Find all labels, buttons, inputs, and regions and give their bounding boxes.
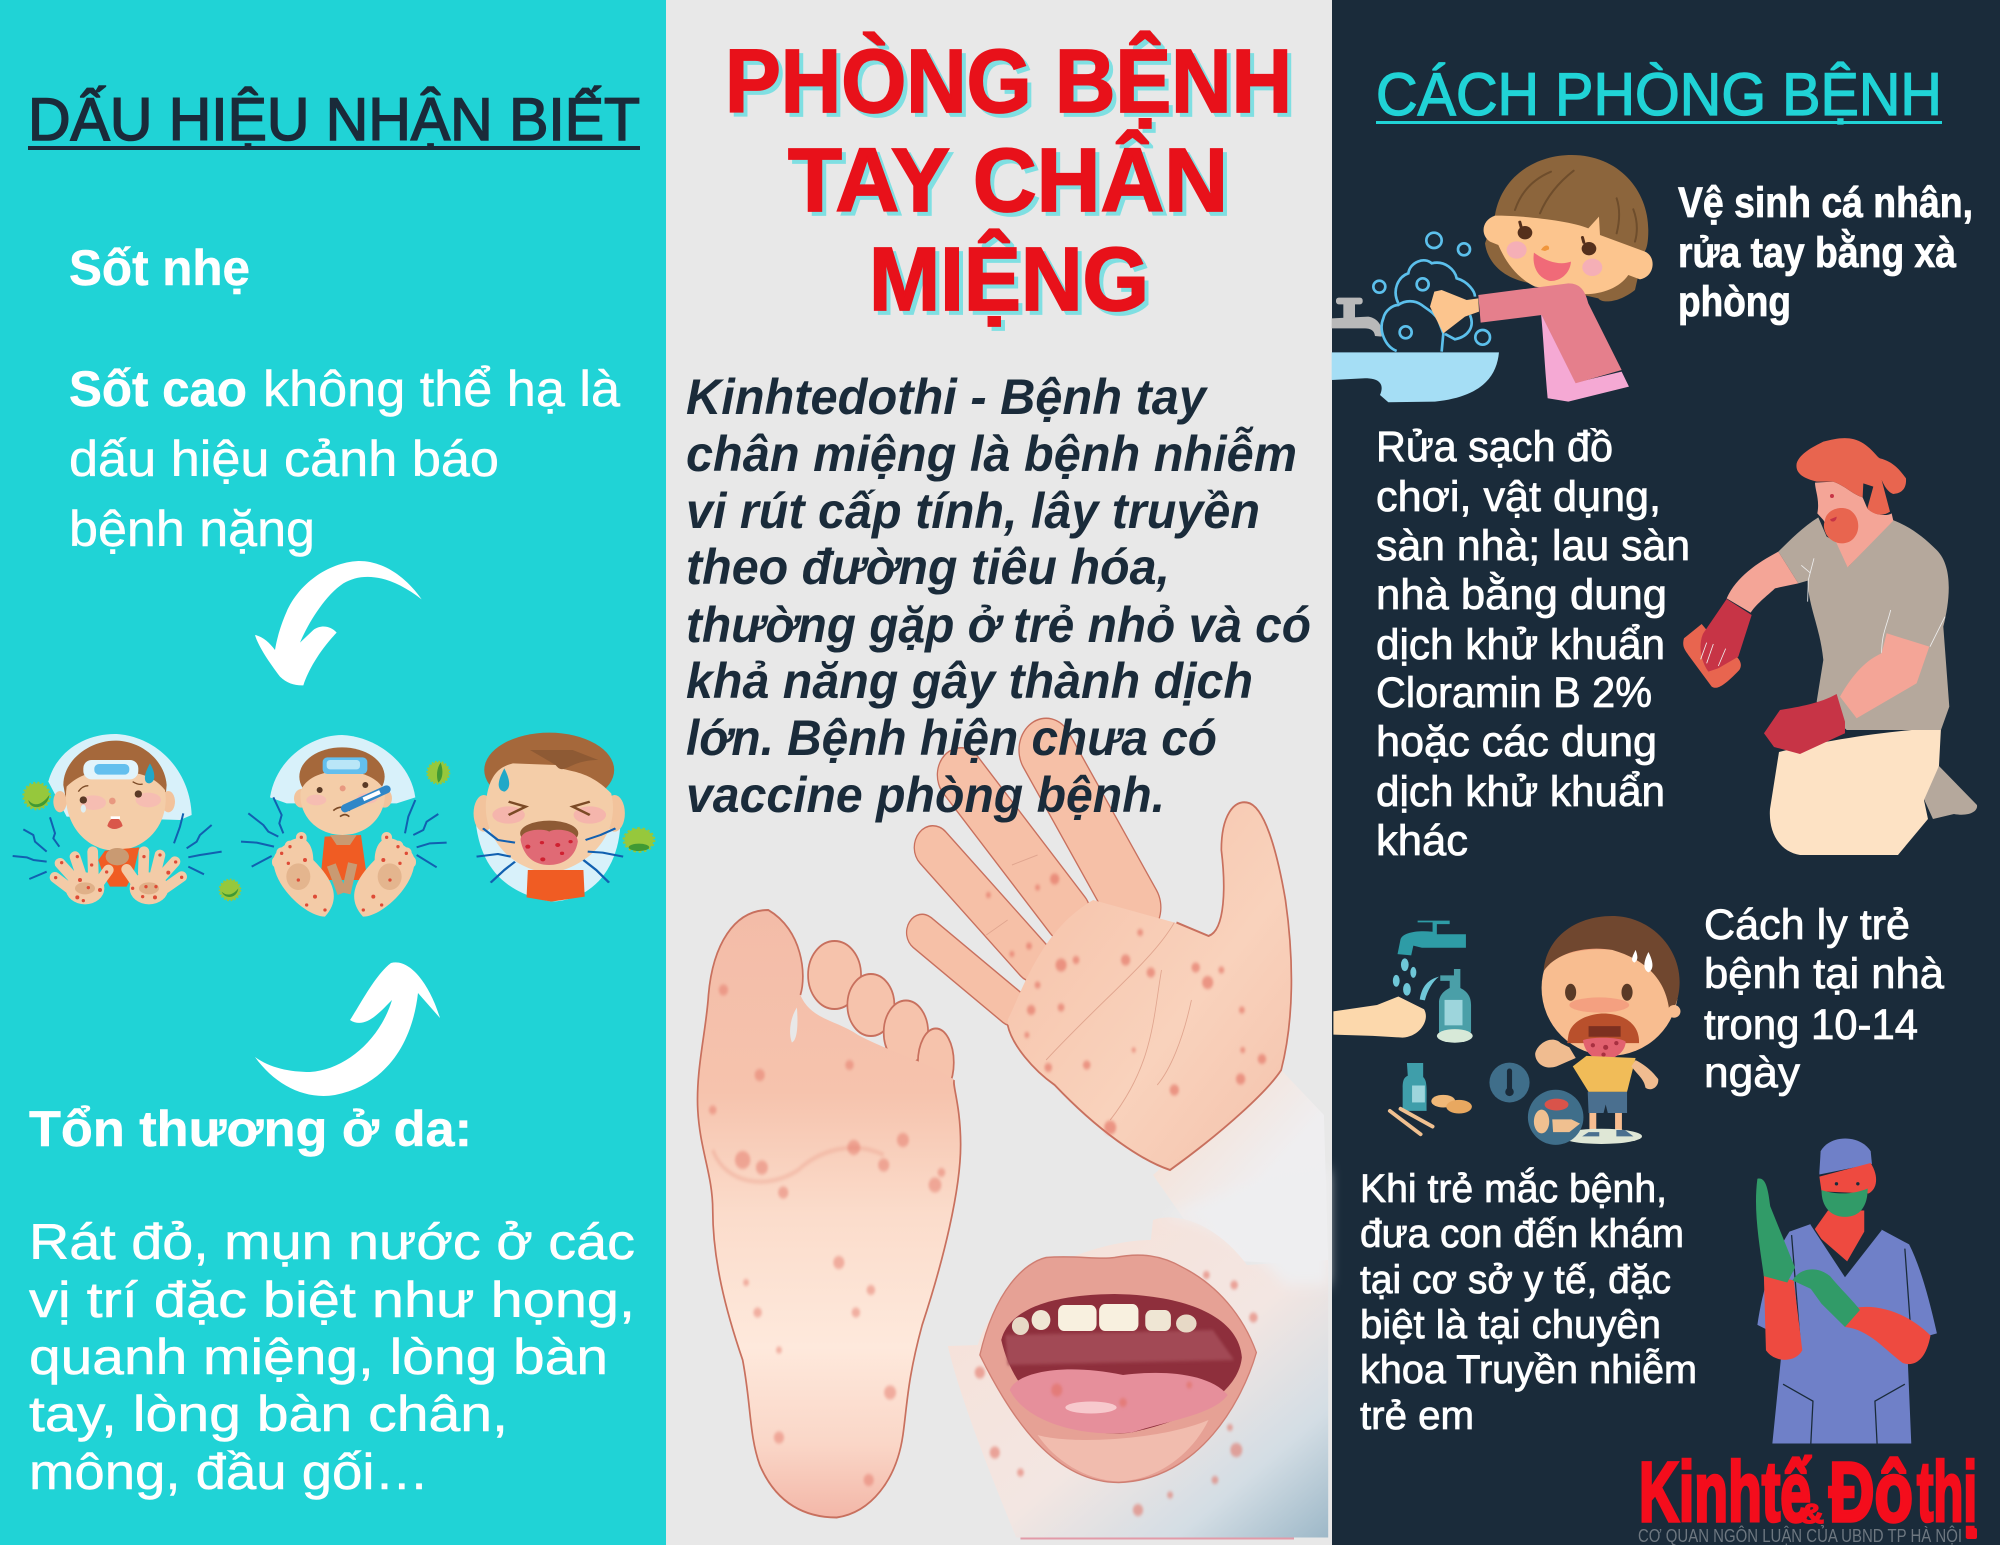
text: intro paragraph: thường gặp ở trẻ nhỏ và có [686,597,1311,653]
title [725,30,1292,330]
text: intro paragraph: lớn. Bệnh hiện chưa có [686,710,1217,766]
illustration: child with tongue [474,733,653,902]
text: see a doctor: tại cơ sở y tế, đặc [1360,1258,1671,1302]
arrow: up [255,962,440,1096]
text: high fever warning: Sốt cao [69,361,247,417]
logo: & [1800,1498,1824,1529]
illustrations: three sick children [13,733,653,917]
logo: Kinhtế [1639,1445,1811,1539]
text: cleaning: Rửa sạch đồ [1376,423,1613,471]
text: cleaning: chơi, vật dụng, [1376,473,1661,521]
text: mild fever: Sốt nhẹ [69,240,250,296]
title: MIỆNG [869,228,1149,330]
text: cleaning: khác [1376,817,1468,865]
text: high fever warning: bệnh nặng [69,501,315,557]
text: see a doctor: đưa con đến khám [1360,1212,1684,1256]
illustration: hand [922,750,1328,1265]
text: high fever warning: không thể hạ là [263,361,620,417]
text: isolate sick children: bệnh tại nhà [1704,950,1944,998]
text: isolate sick children: trong 10-14 [1704,1001,1918,1049]
text: cleaning: dịch khử khuẩn [1376,768,1665,816]
text: skin lesions description: Rát đỏ, mụn nước ở các [29,1214,635,1270]
text: intro paragraph: theo đường tiêu hóa, [686,539,1170,595]
title: TAY CHÂN [788,129,1228,231]
text: cleaning: hoặc các dung [1376,718,1657,766]
illustration: mouth [948,1170,1328,1538]
text: cleaning: Cloramin B 2% [1376,669,1652,717]
illustration: foot [698,910,961,1518]
text: see a doctor [1360,1166,1697,1438]
text: cleaning: dịch khử khuẩn [1376,621,1665,669]
text: intro paragraph [686,369,1311,823]
illustration: child with feet and thermometer [241,735,449,917]
text: skin lesions description: quanh miệng, lòng bàn [29,1329,608,1385]
text: personal hygiene: phòng [1678,278,1791,326]
heading: signs: DẤU HIỆU NHẬN BIẾT [28,86,640,153]
text: skin lesions description: tay, lòng bàn chân, [29,1386,508,1442]
illustration: child with hands [13,734,240,904]
text: intro paragraph: vi rút cấp tính, lây truyền [686,483,1260,539]
text: cleaning: nhà bằng dung [1376,571,1667,619]
illustration: doctor [1756,1138,1937,1444]
illustration: man cleaning floor [1683,438,1977,855]
panel: main background [666,0,1332,1545]
text: intro paragraph: Kinhtedothi - Bệnh tay [686,369,1208,425]
text: high fever warning: dấu hiệu cảnh báo [69,431,499,487]
text: see a doctor: trẻ em [1360,1394,1474,1438]
arrow: down [255,561,422,685]
illustration: sick boy [1489,916,1680,1145]
text: isolate sick children [1704,901,1944,1097]
panel: signs background [0,0,666,1545]
text: intro paragraph: chân miệng là bệnh nhiễm [686,426,1297,482]
text: personal hygiene: rửa tay bằng xà [1678,228,1957,277]
text: high fever warning [69,361,620,557]
illustration: hand, faucet and soap [1333,921,1473,1134]
illustration: foot, hand and mouth [698,750,1328,1538]
text: skin lesions description: mông, đầu gối… [29,1444,429,1500]
text: isolate sick children: ngày [1704,1049,1801,1097]
text: personal hygiene [1678,179,1973,326]
illustrations: hygiene items, sick boy, doctor [1333,916,1937,1444]
illustration: girl washing hands [1332,155,1653,402]
text: see a doctor: khoa Truyền nhiễm [1360,1347,1697,1392]
text: skin lesions description [29,1214,635,1500]
title: PHÒNG BỆNH [725,30,1292,132]
text: cleaning [1376,423,1690,865]
panel: prevention background [1332,0,2000,1545]
logo: Đô [1829,1445,1913,1539]
text: see a doctor: biệt là tại chuyên [1360,1303,1661,1347]
text: isolate sick children: Cách ly trẻ [1704,901,1910,949]
text: skin lesions heading: Tổn thương ở da: [29,1101,472,1157]
text: see a doctor: Khi trẻ mắc bệnh, [1360,1166,1667,1211]
heading: prevention: CÁCH PHÒNG BỆNH [1376,61,1942,128]
text: intro paragraph: vaccine phòng bệnh. [686,767,1165,823]
text: cleaning: sàn nhà; lau sàn [1376,522,1690,570]
text: intro paragraph: khả năng gây thành dịch [686,653,1253,709]
text: skin lesions description: vị trí đặc biệt như họng, [29,1272,635,1328]
